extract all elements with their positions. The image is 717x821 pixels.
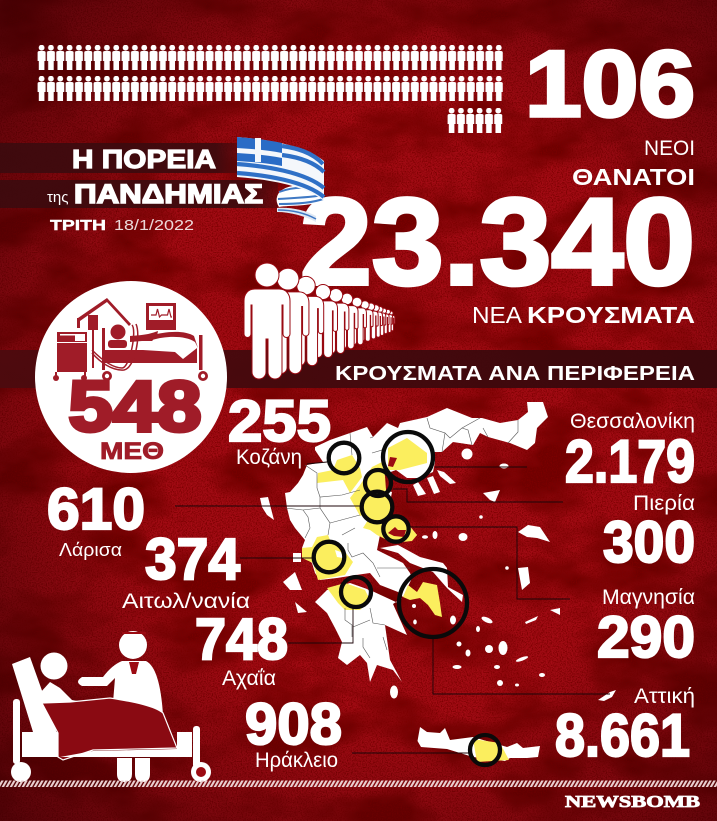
section band: cases per region <box>0 350 717 388</box>
icon: Greek flag ribbon <box>237 137 324 222</box>
Euboea <box>380 545 463 602</box>
title block: the course of the pandemic: της <box>47 189 68 206</box>
leader lines <box>175 462 610 753</box>
106 deaths pictogram rows <box>37 45 504 133</box>
Crete <box>418 727 540 761</box>
islands <box>260 448 616 701</box>
title block: the course of the pandemic <box>0 143 278 234</box>
region labels right: 8.661 <box>555 702 690 769</box>
highlight rings <box>314 432 500 765</box>
region labels left: Κοζάνη <box>236 446 302 469</box>
region labels left: Αχαΐα <box>222 667 276 690</box>
map of Greece <box>175 402 616 765</box>
region labels left: Λάρισα <box>59 540 122 560</box>
title block: the course of the pandemic: ΠΑΝΔΗΜΙΑΣ <box>74 179 263 209</box>
icon: doctor and patient in bed <box>11 631 211 782</box>
region labels left: 255 <box>228 389 331 454</box>
icon: queue of people <box>244 263 395 379</box>
region labels left: Ηράκλειο <box>255 749 338 772</box>
dark red gulf notches <box>352 457 406 592</box>
title block: the course of the pandemic: ΤΡΙΤΗ <box>50 217 106 234</box>
stat: 23.340 new cases: 23.340 <box>300 174 695 311</box>
section band: cases per region: ΚΡΟΥΣΜΑΤΑ ΑΝΑ ΠΕΡΙΦΕΡΕΙΑ <box>335 363 695 385</box>
Chalkidiki peninsulas <box>413 470 456 496</box>
region labels right: 2.179 <box>565 428 695 495</box>
yellow highlighted regions <box>302 438 509 762</box>
region labels right: 300 <box>603 510 695 575</box>
region labels left: Αιτωλ/νανία <box>122 590 250 613</box>
panel: ICU circle <box>35 281 227 473</box>
stat: 23.340 new cases: ΝΕΑ <box>472 302 523 328</box>
decorative hatch strip <box>0 780 717 787</box>
logo: Newsbomb: NEWSBOMB <box>565 792 700 811</box>
title block: the course of the pandemic: Η ΠΟΡΕΙΑ <box>72 144 216 174</box>
region labels right <box>555 410 695 769</box>
region labels right: Πιερία <box>633 492 695 515</box>
panel: ICU circle: 548 <box>68 368 202 447</box>
stat: 106 new deaths: 106 <box>525 31 695 136</box>
stat: 106 new deaths <box>525 31 695 190</box>
stat: 106 new deaths: ΝΕΟΙ <box>644 137 695 160</box>
Peloponnese <box>315 583 407 682</box>
region labels left: 610 <box>47 477 145 542</box>
title block: the course of the pandemic: 18/1/2022 <box>114 217 194 234</box>
panel: ICU circle: ΜΕΘ <box>100 438 164 465</box>
mainland <box>285 402 548 597</box>
regional border lines <box>285 418 518 658</box>
region labels right: Θεσσαλονίκη <box>570 410 695 433</box>
region labels left: 374 <box>145 527 240 592</box>
region labels right: Μαγνησία <box>602 586 695 609</box>
region labels right: Αττική <box>634 685 695 708</box>
region labels left <box>47 389 342 772</box>
stat: 106 new deaths: ΘΑΝΑΤΟΙ <box>572 164 695 190</box>
region labels left: 748 <box>195 607 288 672</box>
stat: 23.340 new cases: ΚΡΟΥΣΜΑΤΑ <box>527 302 695 328</box>
white patch in Aitoloakarnania ring <box>335 550 343 558</box>
region labels left: 908 <box>245 692 342 757</box>
icon: ICU bed with monitor <box>53 298 208 381</box>
region labels right: 290 <box>597 605 695 670</box>
